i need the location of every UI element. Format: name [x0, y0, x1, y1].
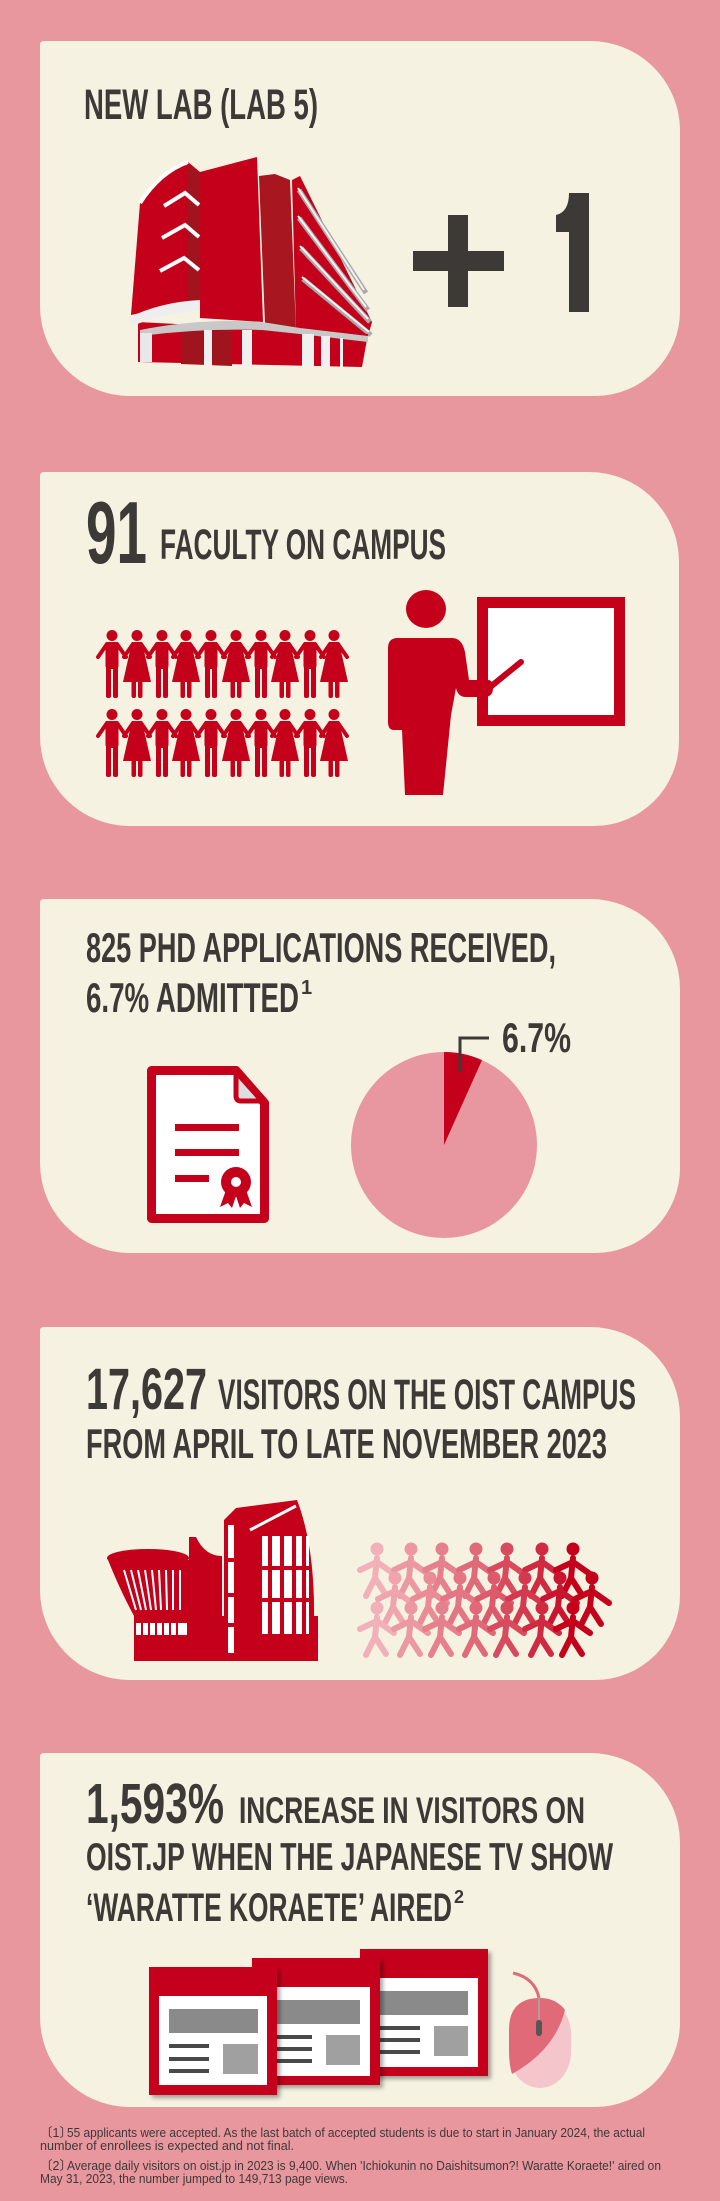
heading: website increase — [86, 1772, 613, 1930]
footnotes — [40, 2126, 661, 2186]
plus one — [413, 193, 589, 312]
heading: visitors — [86, 1357, 636, 1467]
footnotes: 55 applicants were accepted. As the last batch of accepted students is due to start in January 2024, the actual — [67, 2126, 645, 2140]
footnotes: Average daily visitors on oist.jp in 2023 is 9,400. When 'Ichiokunin no Daishitsumon?! Waratte Koraete!' aired on — [67, 2159, 661, 2173]
panel: website visitors — [40, 1753, 680, 2107]
icon: certificate document — [152, 1070, 264, 1218]
heading: website increase: ‘WARATTE KORAETE’ AIRED — [86, 1886, 452, 1930]
icon: teacher at board — [388, 590, 620, 795]
footnotes: May 31, 2023, the number jumped to 149,713 page views. — [40, 2172, 348, 2186]
heading: website increase: INCREASE IN VISITORS ON — [239, 1790, 585, 1831]
heading: website increase: 2 — [454, 1887, 464, 1907]
heading: 91 faculty — [86, 483, 446, 582]
panel: new lab — [40, 41, 680, 396]
icon: faculty people rows — [98, 630, 348, 777]
heading: new lab: NEW LAB (LAB 5) — [84, 81, 318, 129]
footnotes: 〔1〕 — [40, 2126, 72, 2140]
heading: applications: 1 — [301, 977, 312, 999]
heading: applications — [86, 924, 556, 1021]
panel: phd applications — [40, 899, 680, 1253]
footnotes: number of enrollees is expected and not final. — [40, 2139, 294, 2153]
icon: lab building — [128, 157, 372, 367]
pie chart: 6.7% — [502, 1014, 571, 1061]
icon: browser windows — [149, 1949, 488, 2095]
pie chart — [351, 1014, 571, 1238]
heading: 91 faculty: FACULTY ON CAMPUS — [160, 521, 446, 569]
icon: crowd of visitors — [360, 1542, 609, 1655]
heading: website increase: 1,593% — [86, 1772, 224, 1836]
panel: visitors on campus — [40, 1327, 680, 1680]
panel: faculty — [40, 472, 679, 826]
heading: 91 faculty: 91 — [86, 483, 147, 582]
icon: campus building — [107, 1500, 318, 1661]
icon: mouse — [509, 1973, 571, 2088]
footnotes: 〔2〕 — [40, 2159, 72, 2173]
heading: applications: 6.7% ADMITTED — [86, 974, 299, 1021]
heading: visitors: 17,627 — [86, 1357, 207, 1422]
